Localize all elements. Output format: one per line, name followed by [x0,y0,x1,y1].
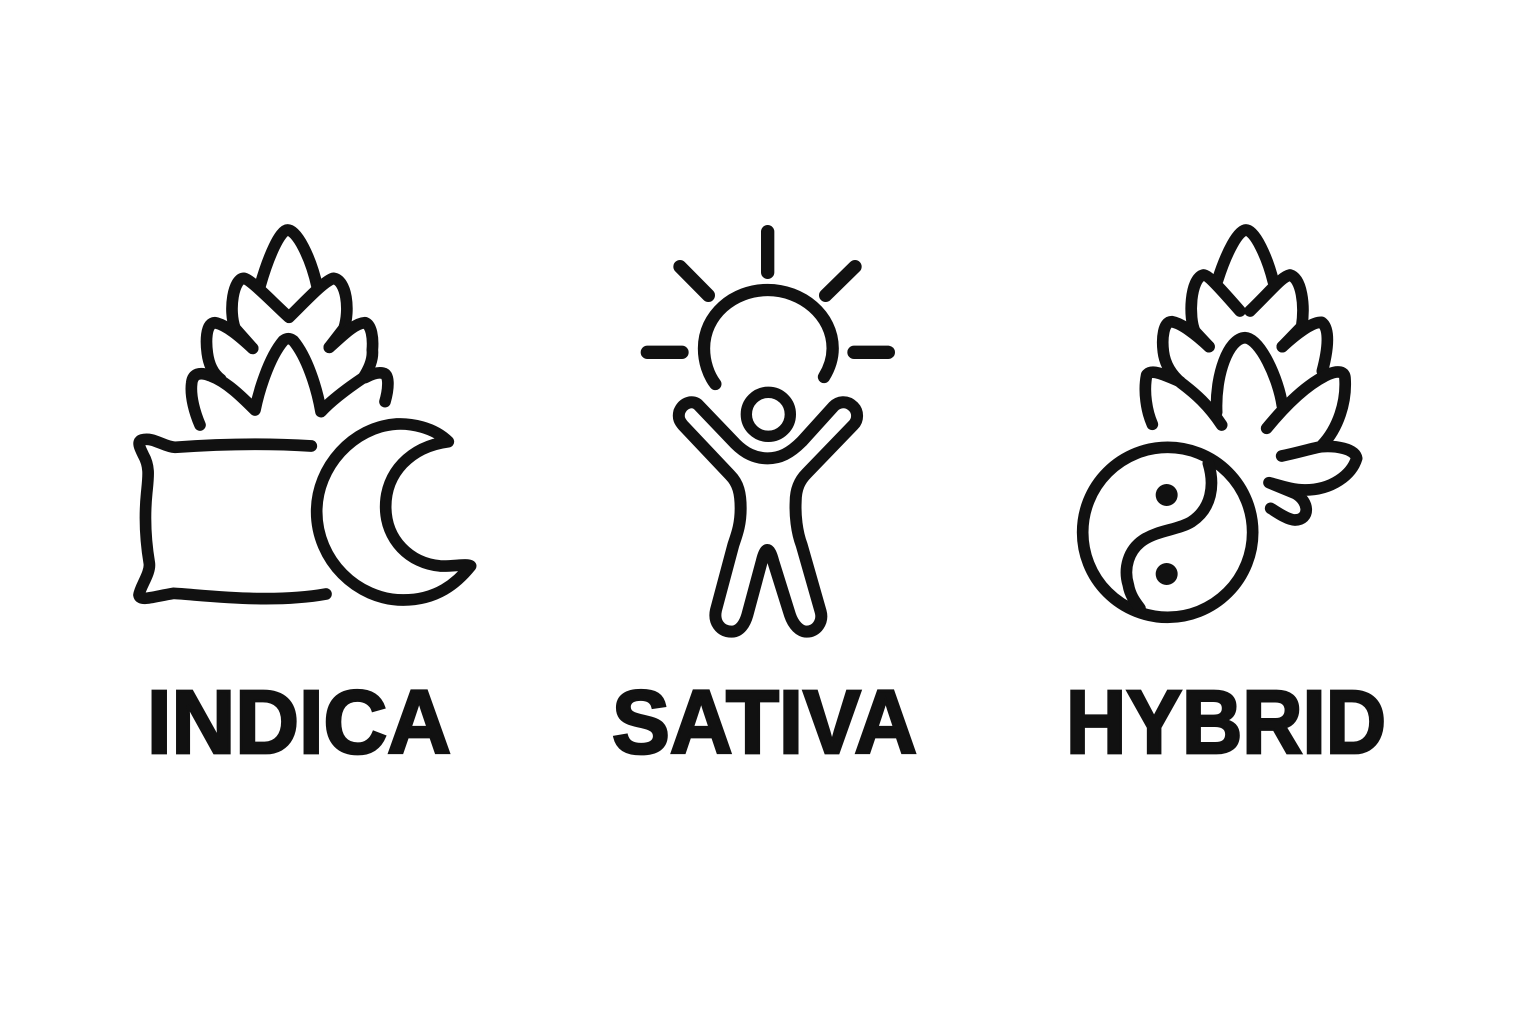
panel: indica [139,230,471,773]
icon: sun rays [647,232,888,352]
icon: crescent moon [317,424,471,600]
label: sativa: SATIVA [612,673,917,773]
icon: yin yang [1083,447,1253,617]
icon: person head [746,392,790,436]
icon: indica leaf [191,230,388,425]
panel: hybrid [1066,230,1386,773]
panel: sativa [612,232,917,773]
icon: pillow [139,439,326,599]
label: hybrid: HYBRID [1066,673,1386,773]
icon: light arc above head [704,290,833,384]
label: indica: INDICA [147,673,451,773]
icon: hybrid leaf [1145,230,1357,520]
icon: person body with raised arms [679,402,857,632]
